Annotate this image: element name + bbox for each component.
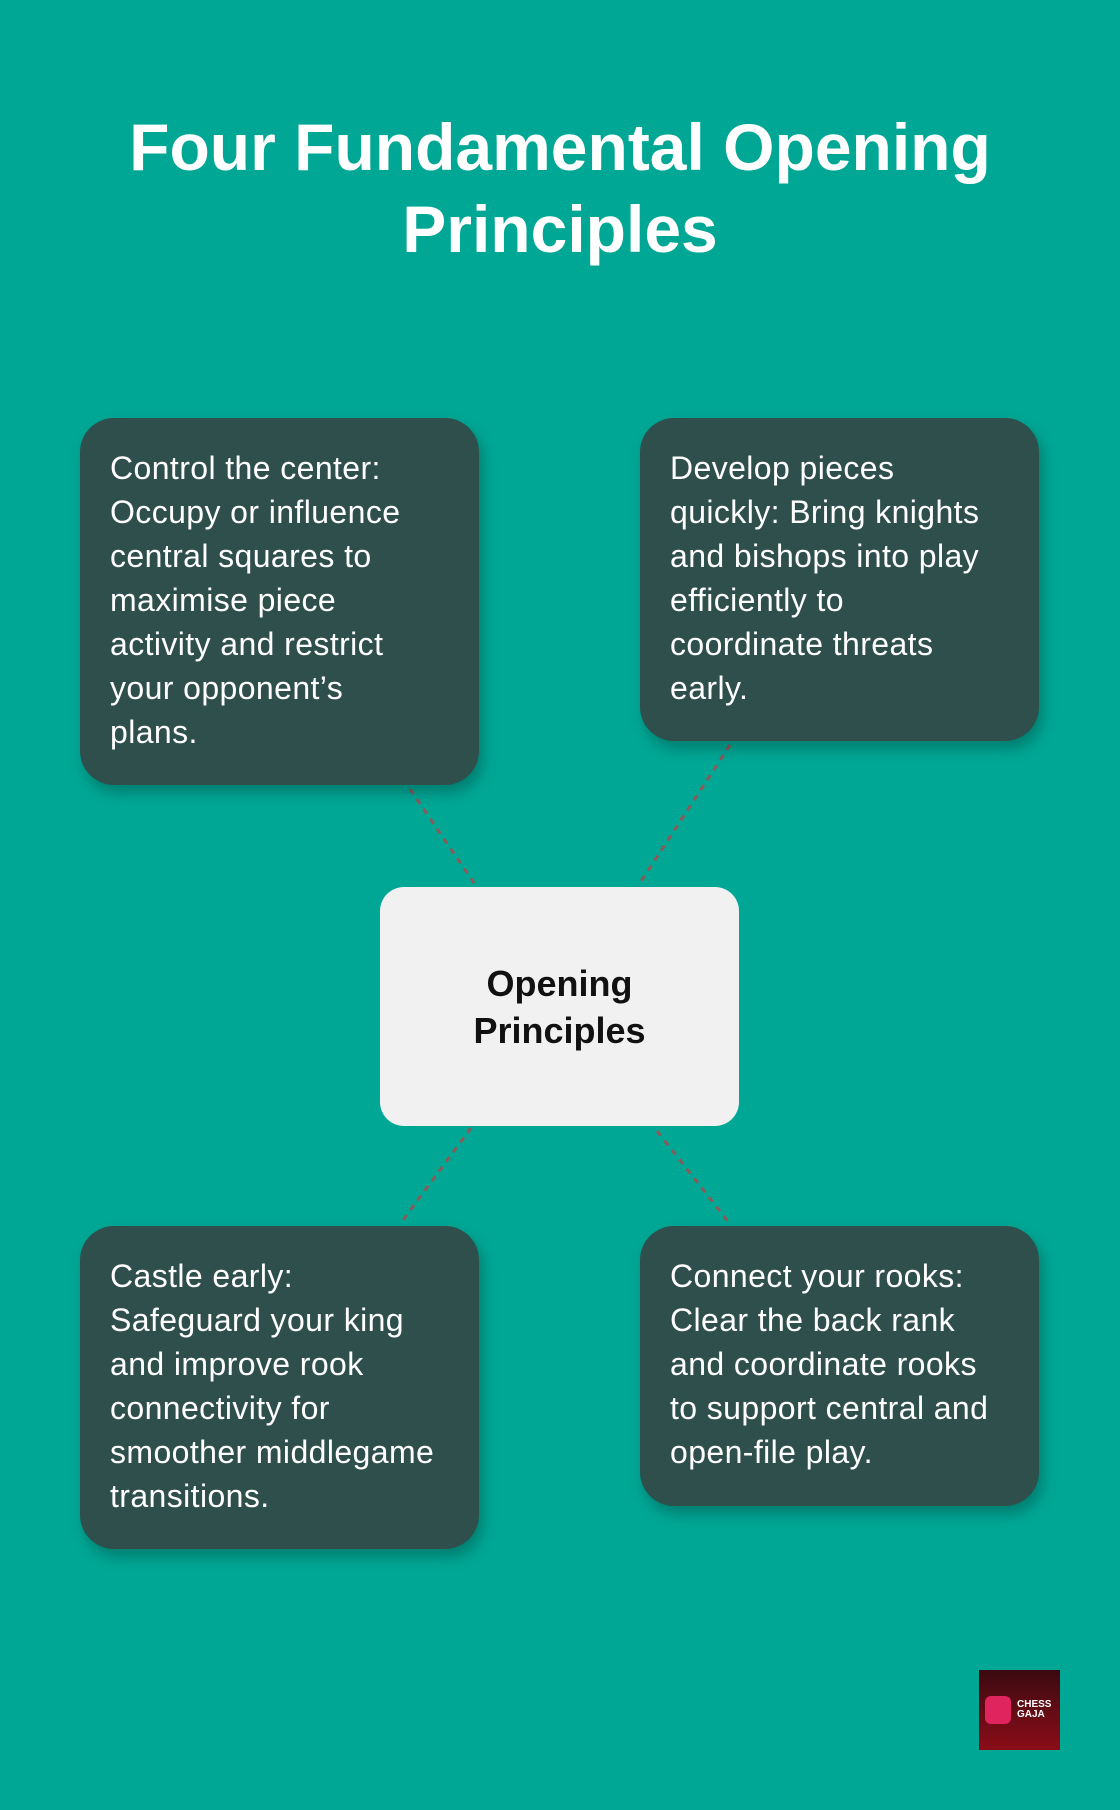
panel: develop pieces: efficiently to xyxy=(670,582,844,618)
panel: develop pieces xyxy=(640,418,1039,741)
panel: develop pieces: and bishops into play xyxy=(670,538,979,574)
panel: connect rooks: Connect your rooks: xyxy=(670,1258,964,1294)
logo: GAJA xyxy=(1017,1709,1045,1720)
panel: develop pieces: Develop pieces xyxy=(670,450,894,486)
panel: castle early: and improve rook xyxy=(110,1346,364,1382)
panel: connect rooks: Clear the back rank xyxy=(670,1302,955,1338)
panel: castle early xyxy=(80,1226,479,1549)
title xyxy=(129,110,991,266)
panel: control the center: plans. xyxy=(110,714,198,750)
panel: control the center: activity and restrict xyxy=(110,626,383,662)
center node: Principles xyxy=(473,1010,646,1050)
panel: develop pieces: early. xyxy=(670,670,748,706)
panel: connect rooks: and coordinate rooks xyxy=(670,1346,977,1382)
panel: control the center: maximise piece xyxy=(110,582,336,618)
logo xyxy=(979,1670,1060,1750)
panel: control the center: Control the center: xyxy=(110,450,381,486)
panel: develop pieces: quickly: Bring knights xyxy=(670,494,979,530)
center node: Opening xyxy=(486,962,632,1004)
panel: control the center: your opponent’s xyxy=(110,670,343,706)
panel: control the center: Occupy or influence xyxy=(110,494,400,530)
panel: control the center: central squares to xyxy=(110,538,372,574)
panel: castle early: transitions. xyxy=(110,1478,270,1514)
panel: control the center xyxy=(80,418,479,785)
panel: castle early: connectivity for xyxy=(110,1390,330,1426)
panel: connect rooks: open-file play. xyxy=(670,1434,873,1470)
logo: CHESS xyxy=(1017,1699,1051,1710)
panel: castle early: smoother middlegame xyxy=(110,1434,434,1470)
panel: develop pieces: coordinate threats xyxy=(670,626,933,662)
center node xyxy=(380,887,739,1126)
panel: castle early: Safeguard your king xyxy=(110,1302,404,1338)
panel: connect rooks xyxy=(640,1226,1039,1506)
panel: connect rooks: to support central and xyxy=(670,1390,988,1426)
title: Principles xyxy=(402,192,718,266)
title: Four Fundamental Opening xyxy=(129,110,991,184)
panel: castle early: Castle early: xyxy=(110,1258,293,1294)
